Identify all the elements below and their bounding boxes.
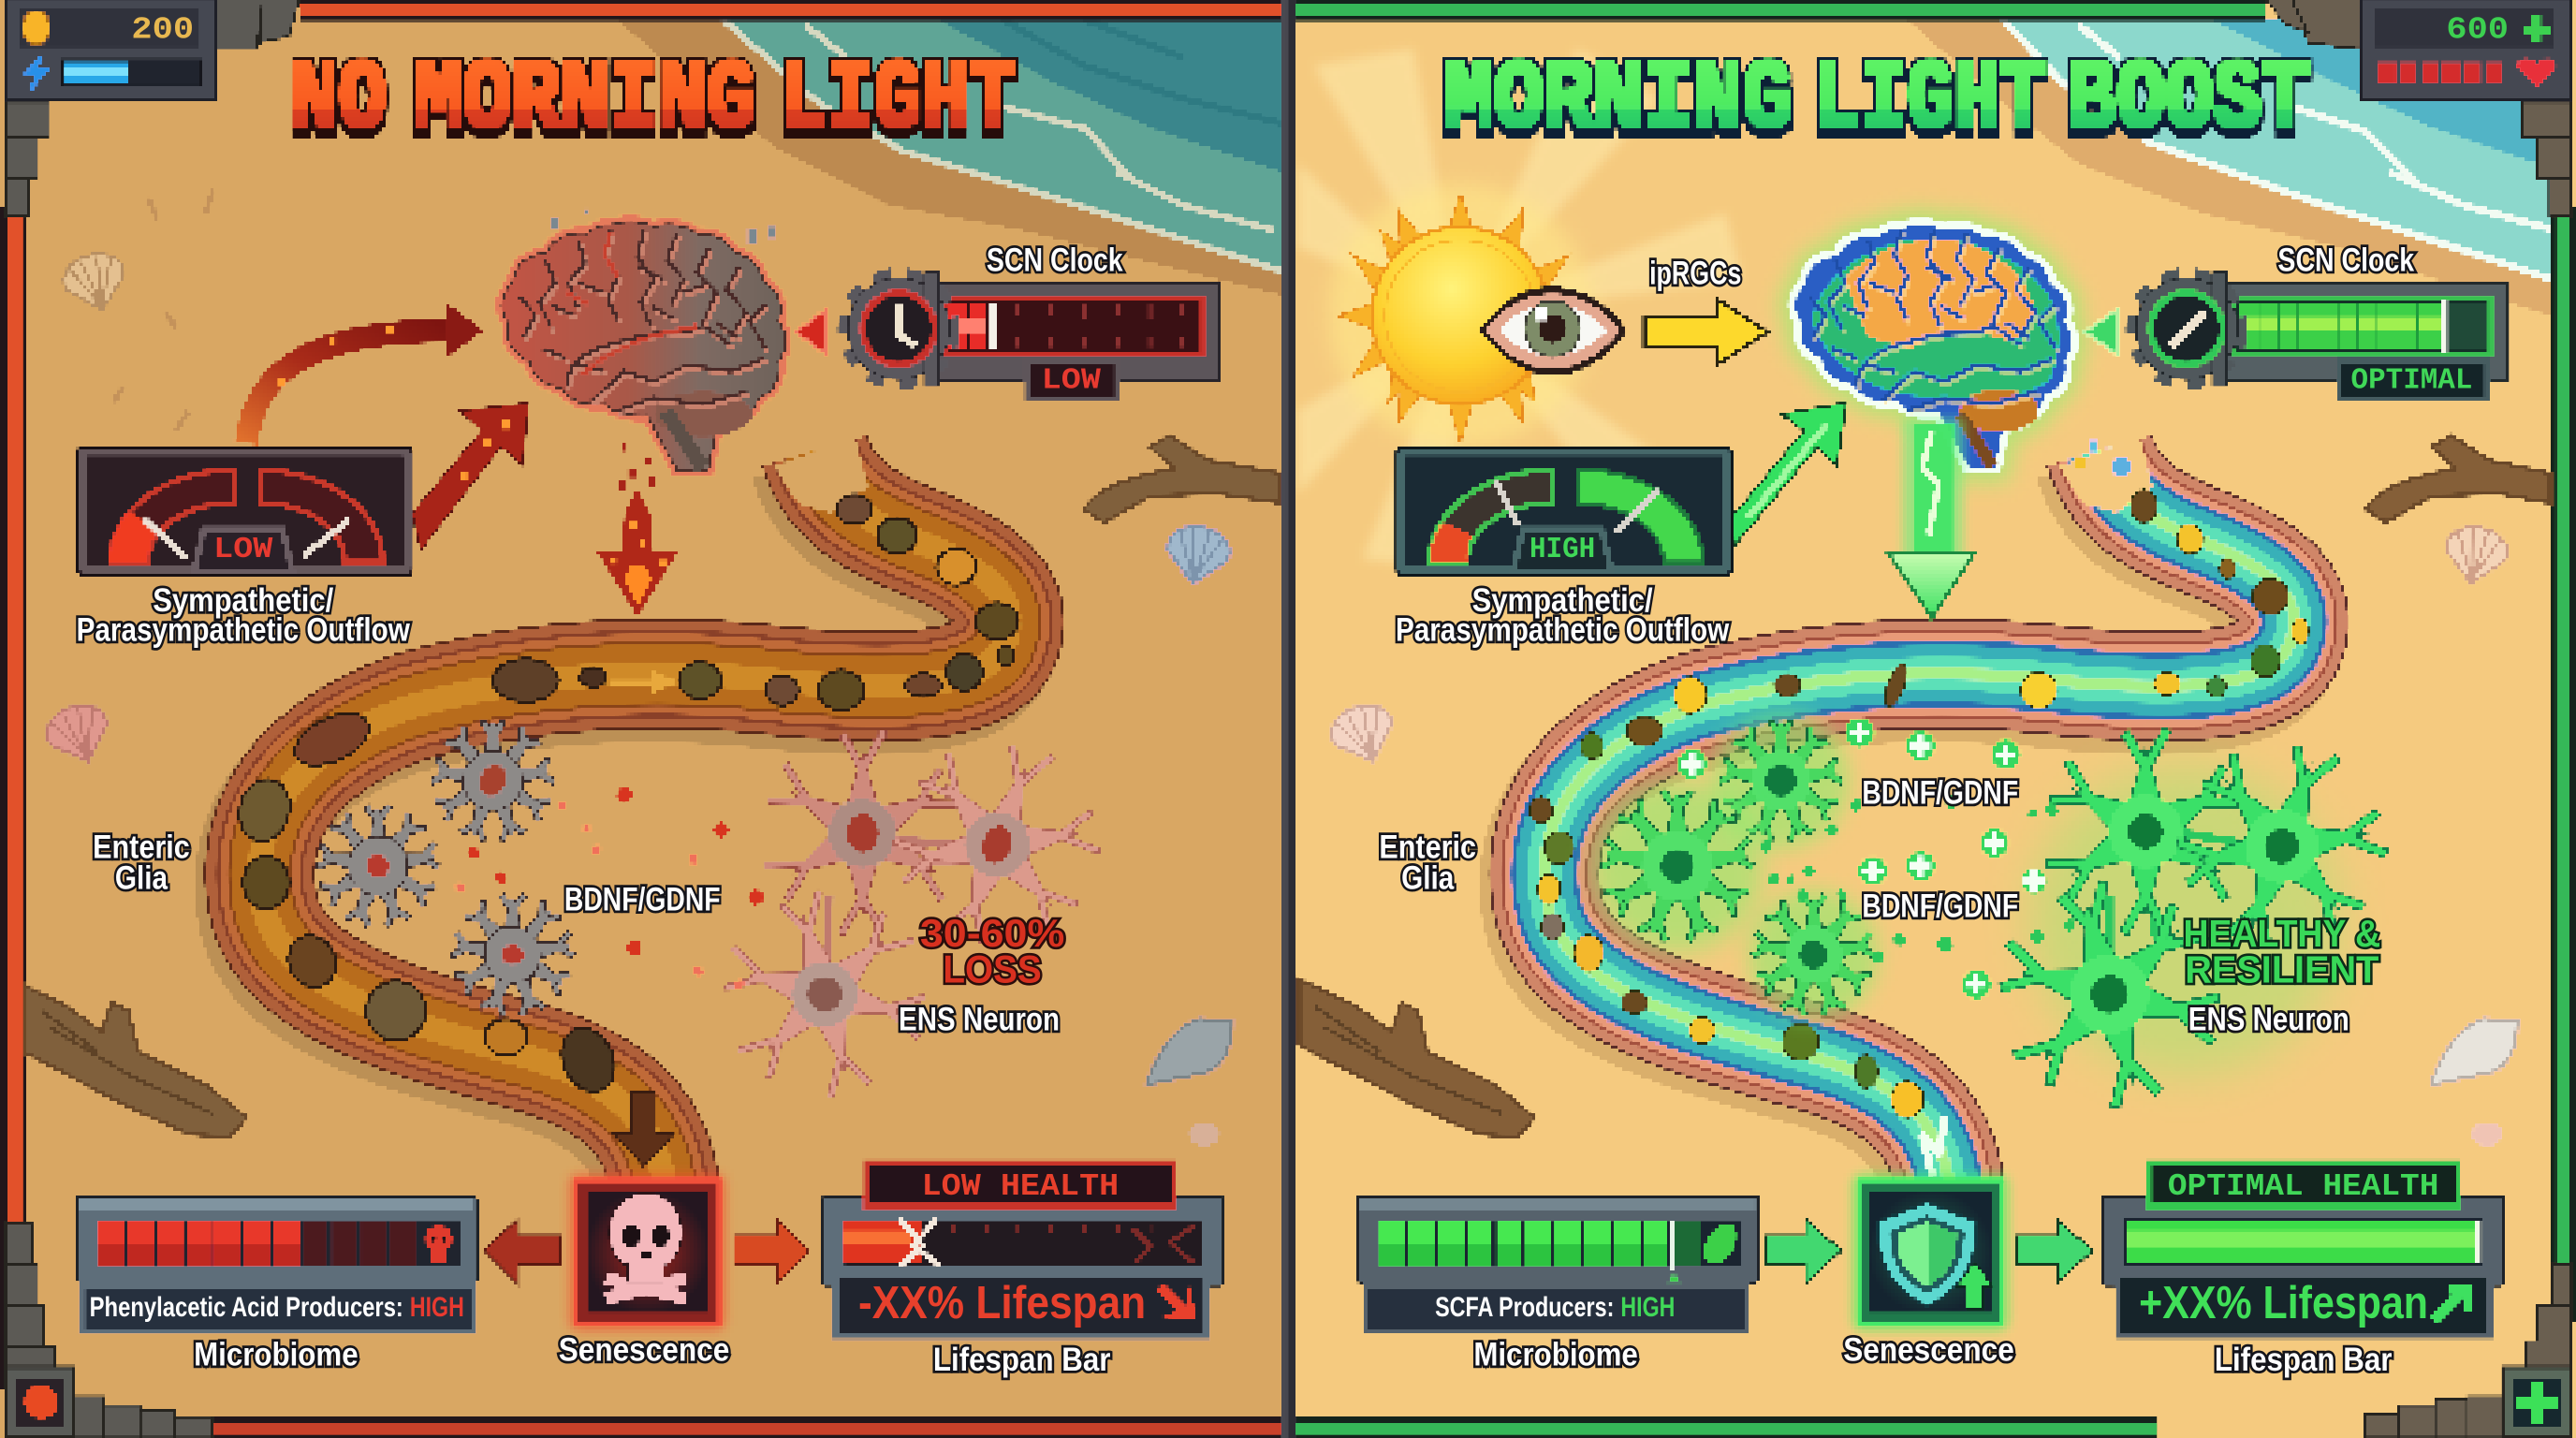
label: optimal: OPTIMAL: [2351, 364, 2472, 397]
SCN clock panel: left: [844, 271, 1219, 400]
gauge panel: left: [77, 447, 413, 575]
label: outflow left: [77, 582, 410, 649]
label: gauge low: LOW: [213, 534, 272, 566]
green BDNF sparkles: [1677, 718, 2076, 999]
microbiome panel: left: [77, 1196, 476, 1331]
title: right: MORNING: [1444, 44, 1793, 156]
label: enteric glia left: Enteric: [93, 829, 190, 865]
label: low health: LOW HEALTH: [922, 1169, 1119, 1205]
label: gauge high: HIGH: [1530, 534, 1595, 566]
gut tube: right: [1536, 437, 2294, 1201]
label: outflow right: Sympathetic/: [1472, 582, 1653, 619]
center divider: [1280, 0, 1296, 1438]
callout: 30-60% loss: LOSS: [943, 947, 1042, 991]
title: left: [291, 44, 1016, 156]
callout: 30-60% loss: 30-60%: [920, 911, 1064, 955]
title: right: BOOST: [2069, 44, 2310, 156]
sun: [1329, 184, 1592, 447]
label: ENS neuron right: ENS Neuron: [2188, 1002, 2349, 1038]
label: senescence left: Senescence: [559, 1331, 729, 1368]
green arrows: [1766, 1220, 2093, 1284]
label: enteric glia right: Glia: [1401, 860, 1455, 897]
label: outflow right: [1396, 582, 1730, 649]
glia: left: [319, 723, 571, 1012]
gut contents: right: [1530, 440, 2308, 1175]
lifespan panel: right: [2103, 1162, 2504, 1336]
title: right: LIGHT: [1814, 44, 2047, 156]
label: microbiome left: Microbiome: [194, 1337, 359, 1373]
label: BDNF right bottom: BDNF/GDNF: [1862, 888, 2018, 925]
label: SCN clock right: SCN Clock: [2277, 242, 2415, 279]
title: left: NO: [291, 44, 386, 156]
HUD score: left: 200: [131, 12, 194, 48]
neurons: left: [708, 720, 1121, 1114]
label: senescence right: Senescence: [1843, 1331, 2014, 1368]
label: enteric glia right: [1379, 829, 1476, 897]
title: right: [1444, 44, 2310, 156]
label: ipRGCs: ipRGCs: [1649, 256, 1741, 292]
label: BDNF right top: BDNF/GDNF: [1862, 774, 2018, 811]
brain: left: [502, 209, 785, 470]
label: phenylacetic: HIGH: [410, 1292, 464, 1323]
gauge panel: right: [1397, 447, 1732, 575]
label: BDNF left: BDNF/GDNF: [564, 881, 721, 917]
callout: 30-60% loss: [920, 911, 1064, 991]
title: left: MORNING: [414, 44, 755, 156]
label: phenylacetic: Phenylacetic Acid Producers:: [90, 1292, 403, 1323]
label: lifespan bar right: Lifespan Bar: [2215, 1342, 2393, 1378]
callout: healthy and resilient: RESILIENT: [2185, 948, 2379, 991]
senescence skull box: [568, 1173, 726, 1331]
yellow arrow: [1645, 299, 1767, 365]
label: outflow left: Sympathetic/: [153, 582, 333, 619]
background: right beach: [1296, 0, 2576, 1438]
HUD panel: right: [2361, 0, 2571, 98]
frame: left: [0, 0, 1280, 1438]
label: enteric glia right: Enteric: [1379, 829, 1476, 865]
label: microbiome right: Microbiome: [1473, 1337, 1638, 1373]
rocks: [233, 494, 1018, 1100]
HUD panel: left: [5, 0, 215, 98]
background: left beach: [0, 0, 1281, 1438]
HUD score: right: 600: [2446, 12, 2509, 48]
lifespan value right: +XX% Lifespan: [2139, 1278, 2428, 1328]
label: outflow right: Parasympathetic Outflow: [1396, 612, 1730, 649]
corner button: left: [5, 1367, 74, 1438]
red arrows: [485, 1220, 810, 1284]
label: outflow left: Parasympathetic Outflow: [77, 612, 410, 649]
title: left: LIGHT: [781, 44, 1016, 156]
arrows: right: [1732, 309, 2117, 618]
neurons: right: [1983, 721, 2407, 1123]
corner button: right: [2502, 1367, 2571, 1438]
red BDNF particles: [455, 787, 764, 990]
label: SCFA: SCFA Producers:: [1435, 1292, 1614, 1323]
label: SCN low: LOW: [1042, 364, 1101, 397]
callout: healthy and resilient: HEALTHY &: [2184, 912, 2380, 955]
brain: right: [1792, 222, 2075, 470]
label: optimal health: OPTIMAL HEALTH: [2168, 1169, 2438, 1205]
glia: right: [1591, 712, 1880, 1020]
arrows: left: [246, 302, 827, 618]
lifespan value left: -XX% Lifespan: [858, 1278, 1146, 1328]
shells: [41, 248, 2517, 1146]
frame: right: [1296, 0, 2576, 1438]
label: SCN clock left: SCN Clock: [987, 242, 1123, 279]
driftwood: [24, 435, 2550, 1137]
microbiome panel: right: [1357, 1196, 1758, 1331]
lifespan panel: left: [823, 1162, 1222, 1336]
label: lifespan bar left: Lifespan Bar: [933, 1342, 1111, 1378]
eye: [1479, 286, 1628, 376]
gut tube: left: [233, 437, 1018, 1201]
callout: healthy and resilient: [2184, 912, 2380, 991]
label: SCFA: HIGH: [1620, 1292, 1675, 1323]
label: ENS neuron left: ENS Neuron: [899, 1002, 1060, 1038]
senescence shield box: [1852, 1173, 2009, 1331]
label: enteric glia left: Glia: [115, 860, 168, 897]
SCN clock panel: right: [2132, 271, 2509, 400]
label: enteric glia left: [93, 829, 190, 897]
